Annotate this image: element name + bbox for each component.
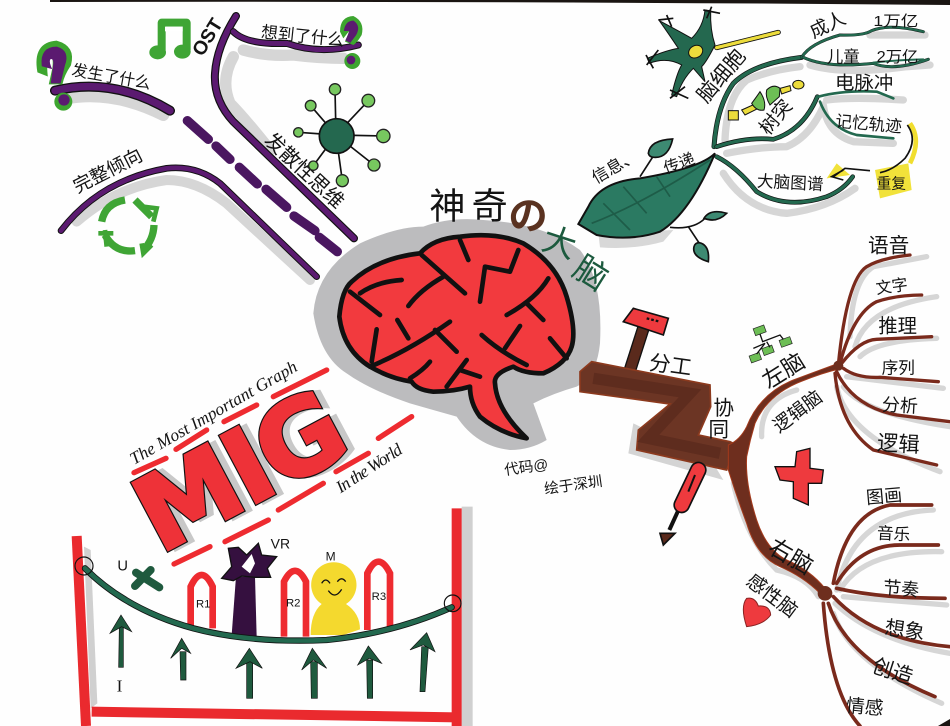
label: rhythm: 节奏 bbox=[882, 577, 920, 600]
figure: VR tree bbox=[222, 543, 277, 640]
label: R2: R2 bbox=[286, 598, 300, 610]
label: logic: 逻辑 bbox=[876, 431, 920, 457]
label: U: U bbox=[117, 559, 128, 575]
icon: screwdriver bbox=[660, 470, 698, 545]
label: divergent thinking: 发散性思维 bbox=[260, 129, 349, 213]
label: right brain: 右脑 bbox=[764, 533, 818, 579]
rope bbox=[85, 568, 452, 641]
callout: repeat: 重复 bbox=[877, 174, 906, 192]
icon: neuron bbox=[646, 7, 778, 98]
icon: U cross bbox=[135, 570, 159, 587]
label: emotion: 情感 bbox=[845, 695, 884, 719]
label: 200 billion: 2万亿 bbox=[877, 49, 918, 66]
callout: repeat bbox=[827, 123, 916, 198]
icon: heart bbox=[743, 598, 771, 627]
label: creation: 创造 bbox=[869, 655, 916, 689]
label: VR: VR bbox=[271, 535, 290, 551]
icon: divergent virus bbox=[294, 84, 390, 187]
icon: recycling arrows bbox=[98, 200, 157, 253]
label: adult: 成人 bbox=[806, 7, 849, 42]
label: brain atlas: 大脑图谱 bbox=[756, 172, 824, 194]
label: M: M bbox=[326, 550, 336, 564]
panel: central brain bbox=[313, 185, 614, 498]
connector: Z-shaped trunk bbox=[580, 362, 737, 480]
label: brain cells: 脑细胞 bbox=[693, 45, 750, 107]
brain folds bbox=[350, 240, 567, 387]
label: music: 音乐 bbox=[876, 524, 911, 544]
icon: question mark left bbox=[37, 42, 72, 111]
branch: left and right brain trunk bbox=[728, 363, 842, 593]
road: what happened bbox=[55, 87, 170, 111]
label: electric pulse: 电脉冲 bbox=[835, 72, 893, 93]
branch shadows bbox=[733, 257, 950, 703]
branch: brain cells bbox=[714, 27, 928, 147]
label: R3: R3 bbox=[372, 591, 386, 603]
title: brain: 脑 bbox=[566, 249, 614, 298]
brain shape bbox=[339, 235, 573, 438]
upward arrows bbox=[110, 615, 435, 698]
R1 band bbox=[191, 575, 213, 628]
road: divergent thinking bbox=[215, 16, 358, 238]
label: what happened: 发生了什么 bbox=[70, 61, 152, 93]
label: cooperate: 协 bbox=[713, 397, 734, 420]
R2 band bbox=[284, 571, 306, 637]
red dashes bbox=[134, 370, 412, 564]
label: cooperate bbox=[708, 397, 734, 442]
title: possessive mark: の bbox=[508, 194, 548, 238]
icon: hammer bbox=[623, 308, 668, 370]
caption bottom: In the World bbox=[332, 440, 406, 497]
branch: dendrite bbox=[717, 91, 893, 147]
caption top: The Most Important Graph bbox=[126, 357, 301, 468]
branches: right brain bbox=[823, 505, 950, 726]
icon: question mark right bbox=[340, 16, 362, 69]
icon: hierarchy bbox=[749, 325, 792, 363]
label: memory trace: 记忆轨迹 bbox=[835, 112, 903, 136]
label: writing: 文字 bbox=[875, 276, 909, 298]
branches: left brain bbox=[835, 255, 950, 465]
panel: right brain map bbox=[580, 235, 950, 726]
title: big: 大 bbox=[538, 221, 581, 266]
icon: leaf shadow bbox=[598, 230, 673, 248]
label: sequence: 序列 bbox=[882, 358, 915, 377]
MIG outline: MIG bbox=[115, 367, 366, 576]
branch junction knots bbox=[818, 361, 843, 601]
MIG shadow: MIG bbox=[123, 366, 373, 575]
label: completion tendency: 完整倾向 bbox=[70, 144, 146, 197]
label: reasoning: 推理 bbox=[878, 316, 917, 338]
icon: large leaf bbox=[578, 153, 715, 238]
label: child: 儿童 bbox=[827, 48, 860, 67]
label: analysis: 分析 bbox=[881, 395, 918, 417]
label: 100 billion: 1万亿 bbox=[873, 13, 918, 30]
label: language: 语音 bbox=[868, 235, 909, 258]
road: dashed centre line bbox=[187, 121, 337, 252]
label: I: I bbox=[117, 677, 123, 696]
branch shadows bbox=[723, 35, 930, 213]
title: magical: 神奇 bbox=[429, 185, 508, 226]
icon: synapse bbox=[728, 80, 804, 120]
icon: leaf sprigs bbox=[640, 139, 727, 262]
panel: neurons (top right) bbox=[578, 7, 930, 262]
rope anchors bbox=[75, 557, 461, 612]
red frame bbox=[77, 508, 457, 726]
label: OST: OST bbox=[189, 15, 228, 60]
R3 band bbox=[367, 562, 390, 630]
branch: brain atlas bbox=[717, 157, 853, 202]
icon: red cross bbox=[775, 448, 823, 505]
road shadows bbox=[67, 50, 343, 280]
label: division of labour: 分工 bbox=[648, 351, 693, 380]
figure: M smiling person bbox=[311, 562, 360, 635]
credit location: 绘于深圳 bbox=[543, 473, 604, 498]
icon: music note bbox=[149, 23, 191, 59]
brain halo bbox=[313, 219, 600, 450]
label: what came to mind: 想到了什么 bbox=[260, 22, 345, 50]
label: logical brain: 逻辑脑 bbox=[769, 386, 826, 437]
label: transmission: 传递 bbox=[661, 150, 697, 178]
label: imagination: 想象 bbox=[883, 616, 926, 645]
label: R1: R1 bbox=[196, 599, 210, 611]
frame shadows bbox=[84, 507, 473, 726]
label: dendrite: 树突 bbox=[755, 95, 797, 139]
road: completion tendency bbox=[61, 168, 317, 277]
panel: MIG graph bbox=[75, 357, 473, 726]
label: emotional brain: 感性脑 bbox=[742, 570, 802, 622]
label: left brain: 左脑 bbox=[757, 348, 809, 394]
label: drawing: 图画 bbox=[865, 485, 903, 508]
label: information: 信息、 bbox=[588, 146, 641, 187]
credit: 代码@ bbox=[503, 456, 549, 479]
MIG title: MIG bbox=[115, 367, 366, 576]
panel: thinking roads (top left) bbox=[37, 15, 390, 280]
label: cooperate: 同 bbox=[708, 419, 729, 442]
